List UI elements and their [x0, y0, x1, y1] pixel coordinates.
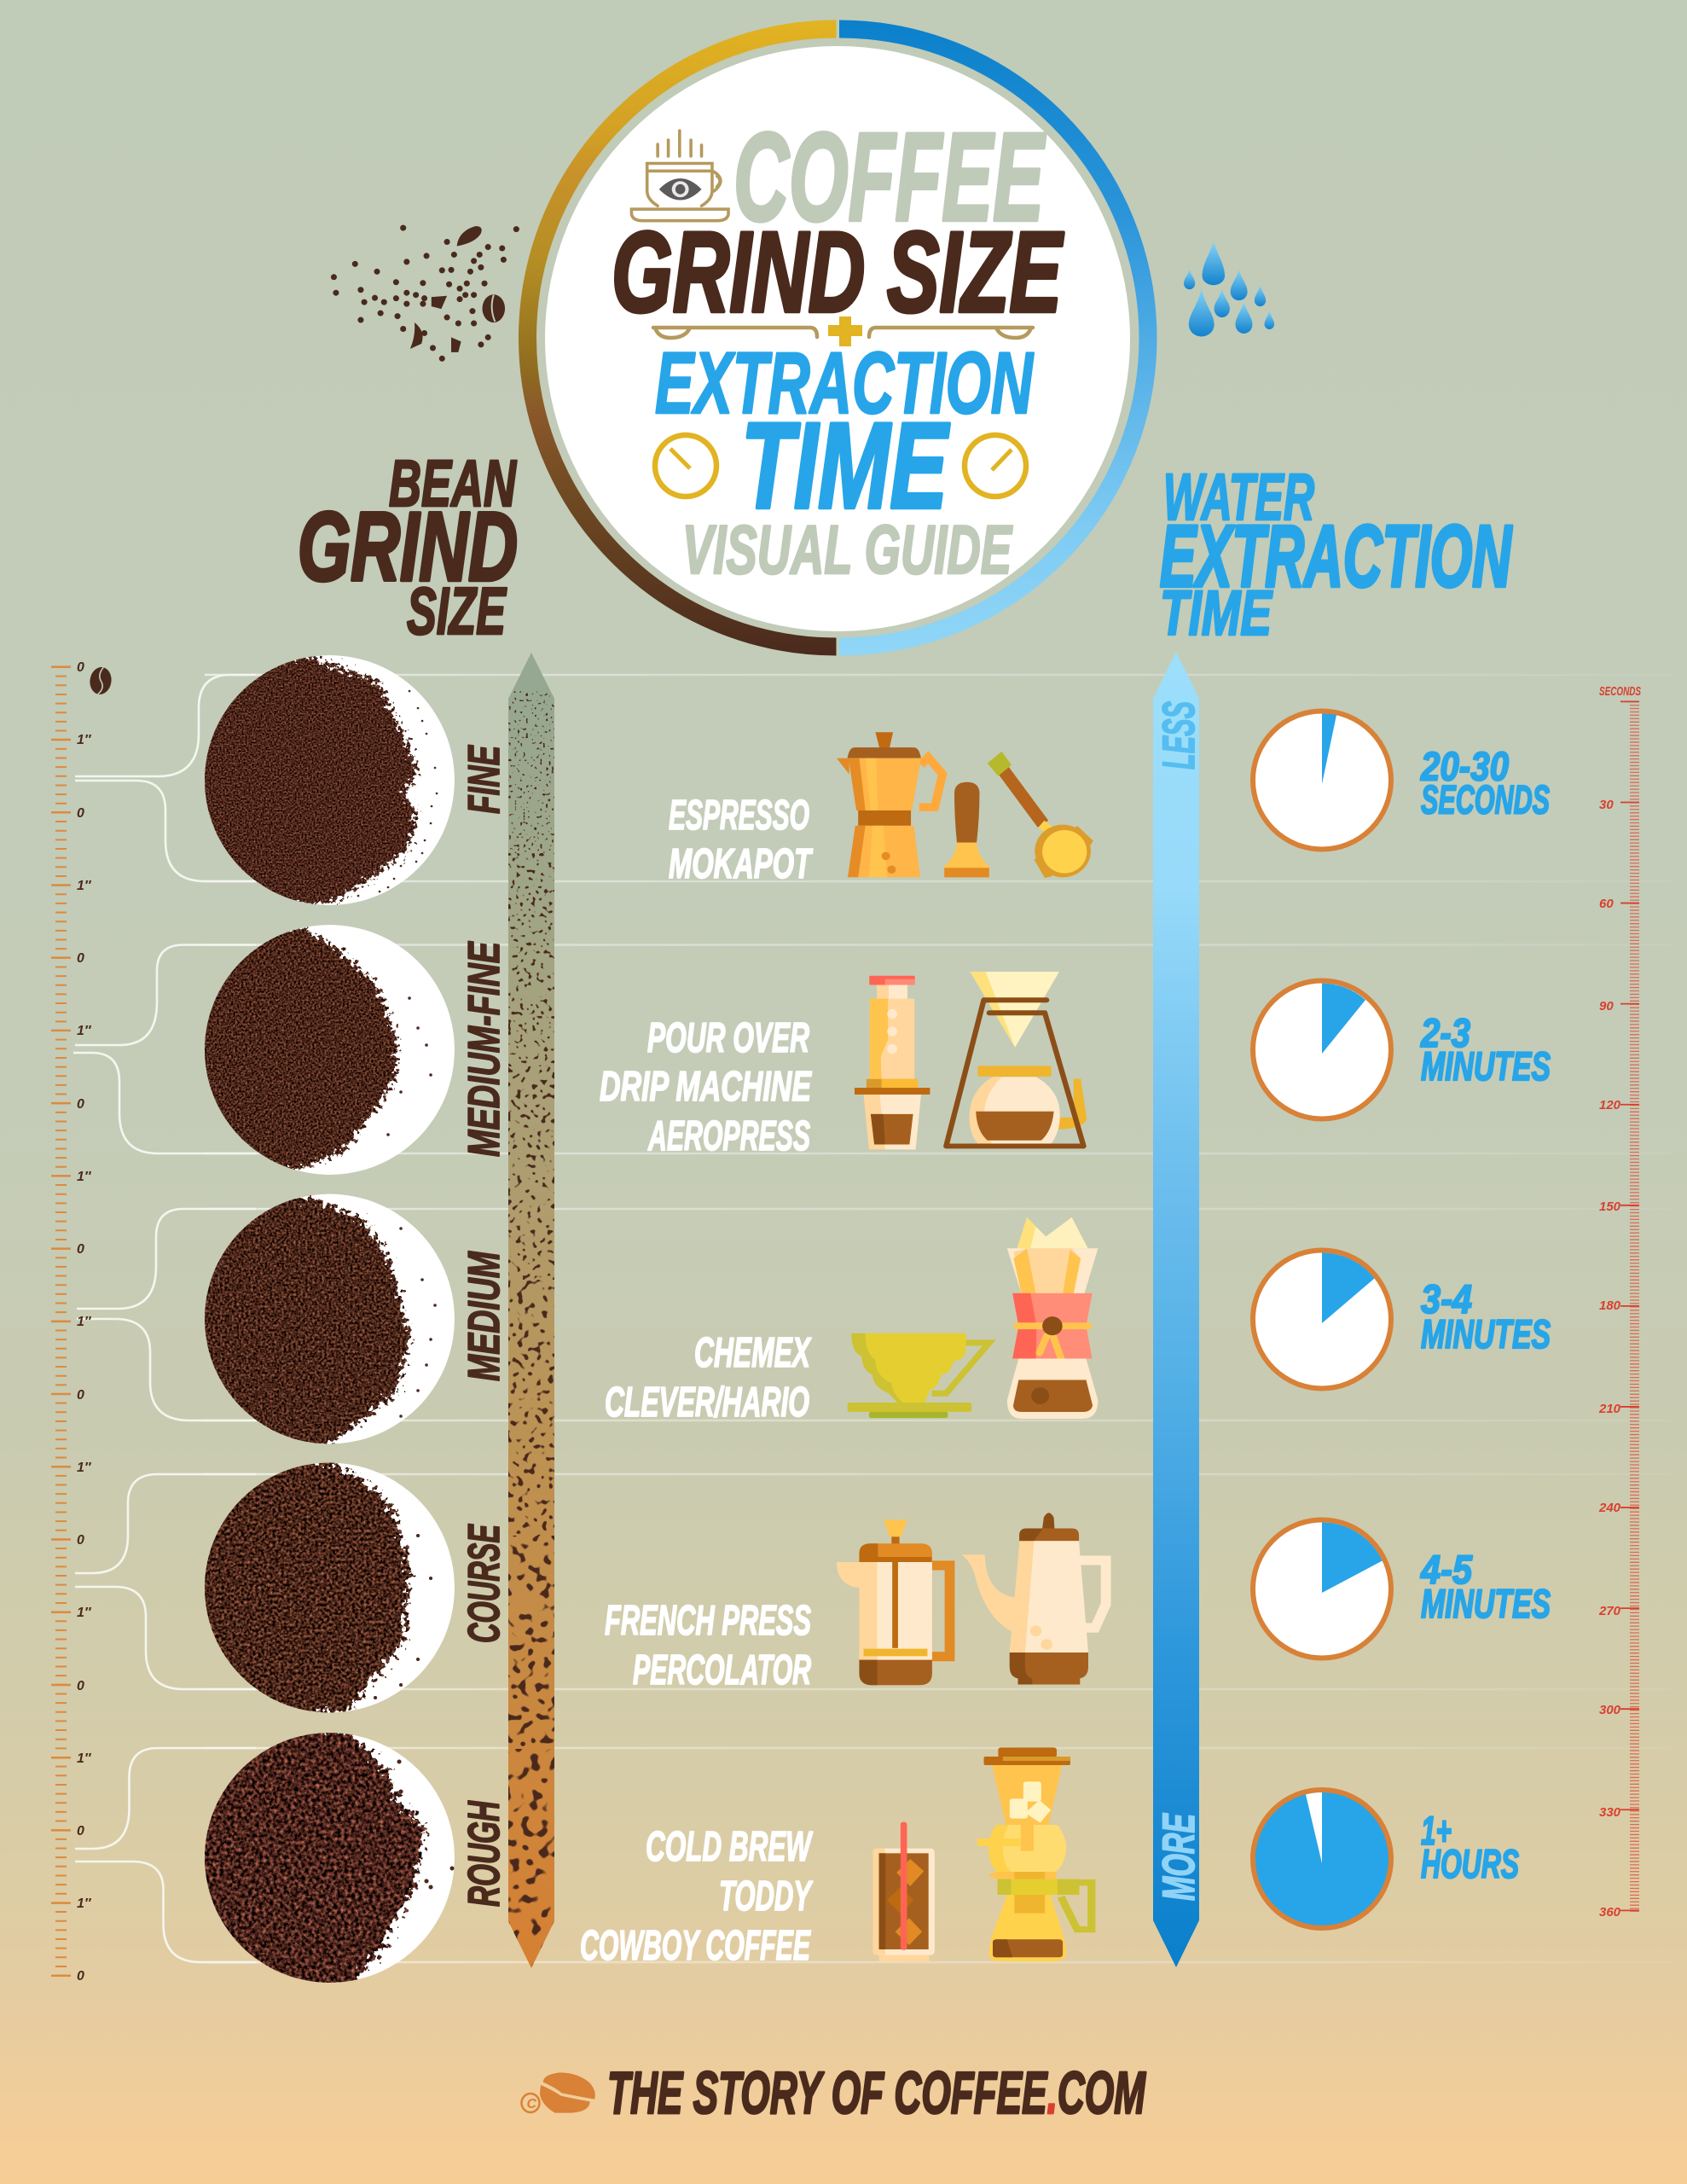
title: grind size: GRIND SIZE — [612, 209, 1064, 336]
methods: french press, percolator: PERCOLATOR — [633, 1647, 811, 1693]
icon: right clock — [965, 435, 1026, 497]
ruler: seconds: 300 — [1599, 1703, 1621, 1717]
row: course — [171, 1450, 1551, 1723]
ruler: seconds: 150 — [1599, 1199, 1621, 1214]
coffee grounds photo: medium-fine — [205, 925, 455, 1175]
heading: bean grind size: SIZE — [407, 573, 507, 648]
methods: pour over, drip machine, aeropress — [600, 1015, 812, 1159]
coffee grounds photo: fine — [205, 655, 455, 905]
methods: french press, percolator: FRENCH PRESS — [605, 1598, 811, 1644]
ruler: inches: 0 — [77, 660, 84, 675]
ruler: inches: 1″ — [77, 879, 92, 893]
label: fine: FINE — [460, 745, 509, 814]
heading: bean grind size: BEAN — [389, 447, 517, 520]
clock: 1+ hours — [1253, 1790, 1391, 1928]
time label: 3-4 minutes — [1421, 1276, 1551, 1356]
copyright mark — [522, 2094, 539, 2112]
row: rough — [205, 1733, 1520, 1983]
methods: cold brew, toddy, cowboy coffee: TODDY — [719, 1873, 814, 1920]
icon: orange coffee bean — [540, 2072, 595, 2113]
ruler: inches: 0 — [77, 1969, 84, 1984]
clock: 4-5 minutes — [1253, 1520, 1391, 1658]
label: more: MORE — [1154, 1813, 1204, 1901]
ruler: seconds: 60 — [1599, 897, 1614, 911]
row: fine — [171, 648, 1093, 913]
icon: scattered coffee grounds — [333, 226, 516, 358]
methods: chemex, clever/hario — [605, 1330, 812, 1426]
methods: cold brew, toddy, cowboy coffee — [580, 1824, 814, 1969]
icon: hario dripper — [848, 1333, 989, 1418]
time label: 3-4 minutes: 3-4 — [1421, 1276, 1472, 1321]
ruler: inches: 0 — [77, 1388, 84, 1403]
plus sign — [828, 317, 862, 346]
ruler: seconds — [1598, 684, 1641, 1920]
label: medium-fine: MEDIUM-FINE — [460, 941, 509, 1157]
coffee grounds photo: course — [205, 1462, 455, 1713]
row separator lines — [205, 675, 1672, 1962]
footer logo — [522, 2059, 1146, 2126]
title: visual guide: VISUAL GUIDE — [682, 512, 1013, 589]
ruler: inches: 1″ — [77, 1315, 92, 1329]
heading: bean grind size — [298, 447, 518, 648]
size brackets — [73, 675, 256, 1962]
icon: portafilter — [988, 752, 1093, 878]
arrow: water time, less to more — [1153, 652, 1204, 1967]
label: medium: MEDIUM — [460, 1251, 509, 1381]
copyright mark: C — [527, 2097, 537, 2111]
clock: 20-30 seconds — [1253, 712, 1391, 850]
clock: 2-3 minutes — [1253, 981, 1391, 1119]
time label: 20-30 seconds: 20-30 — [1420, 744, 1509, 788]
time label: 2-3 minutes — [1420, 1010, 1551, 1089]
row: medium-fine — [171, 917, 1551, 1186]
coffee grounds photo: rough — [205, 1733, 455, 1983]
ruler: inches: 0 — [77, 806, 84, 821]
ruler: inches — [61, 660, 92, 1984]
label: rough: ROUGH — [460, 1800, 509, 1907]
icon: water drops — [1184, 242, 1274, 336]
methods: cold brew, toddy, cowboy coffee: COWBOY COFFEE — [580, 1923, 811, 1969]
icon: right spoon — [869, 328, 1033, 338]
ruler: seconds: 270 — [1598, 1604, 1621, 1618]
ruler: seconds: 210 — [1598, 1402, 1621, 1416]
methods: pour over, drip machine, aeropress: DRIP MACHINE — [600, 1064, 812, 1110]
label: less: LESS — [1154, 701, 1204, 770]
ruler: seconds: 120 — [1599, 1098, 1621, 1112]
ruler: seconds: 330 — [1599, 1805, 1621, 1820]
icon: tamper — [944, 782, 989, 877]
time label: 2-3 minutes: MINUTES — [1421, 1043, 1551, 1089]
ruler: inches: 0 — [77, 1097, 84, 1112]
methods: espresso, mokapot — [669, 793, 814, 887]
title: extraction: EXTRACTION — [655, 334, 1035, 432]
ruler: seconds: 240 — [1598, 1501, 1621, 1515]
icon: coffee cup with eye — [631, 131, 728, 221]
ruler: inches: 0 — [77, 951, 84, 966]
icon: coffee bean — [88, 665, 113, 696]
icon: left spoon — [653, 328, 817, 338]
ruler: seconds: 90 — [1599, 999, 1614, 1014]
time label: 3-4 minutes: MINUTES — [1421, 1311, 1551, 1356]
arrow: grind size, fine to rough — [508, 653, 554, 1968]
row: medium — [171, 1186, 1551, 1455]
white title disc — [545, 46, 1130, 631]
methods: pour over, drip machine, aeropress: POUR OVER — [647, 1015, 809, 1061]
website name: THE STORY OF COFFEE.COM — [607, 2059, 1146, 2126]
methods: pour over, drip machine, aeropress: AEROPRESS — [647, 1113, 810, 1159]
icon: pour-over dripper and carafe — [946, 972, 1087, 1146]
ruler: seconds: 30 — [1599, 798, 1614, 812]
ruler: inches: 0 — [77, 1533, 84, 1548]
icon: cold brew tower — [977, 1747, 1092, 1961]
ruler: inches: 1″ — [77, 1461, 92, 1475]
label: course: COURSE — [460, 1524, 509, 1643]
time label: 4-5 minutes: 4-5 — [1420, 1547, 1473, 1592]
title emblem — [527, 29, 1148, 647]
ruler: inches: 0 — [77, 1824, 84, 1838]
time label: 1+ hours — [1421, 1808, 1519, 1886]
icon: moka pot — [837, 732, 942, 877]
icon: aeropress — [855, 976, 930, 1149]
ruler: inches: 1″ — [77, 1896, 92, 1911]
time label: 4-5 minutes — [1420, 1547, 1551, 1626]
icon: left clock — [655, 435, 716, 497]
progress ring: water blue — [839, 29, 1148, 647]
ruler: inches: 1″ — [77, 1606, 92, 1620]
ruler: inches: 1″ — [77, 1024, 92, 1038]
time label: 2-3 minutes: 2-3 — [1420, 1010, 1470, 1055]
methods: french press, percolator — [605, 1598, 811, 1693]
time label: 20-30 seconds — [1420, 744, 1550, 822]
methods: espresso, mokapot: MOKAPOT — [669, 841, 814, 887]
time label: 20-30 seconds: SECONDS — [1421, 776, 1550, 822]
heading: water extraction time: WATER — [1163, 461, 1314, 534]
heading: bean grind size: GRIND — [298, 493, 518, 601]
methods: chemex, clever/hario: CHEMEX — [694, 1330, 812, 1376]
ruler: inches: 1″ — [77, 733, 92, 747]
time label: 1+ hours: 1+ — [1421, 1808, 1452, 1853]
icon: percolator pot — [961, 1513, 1106, 1685]
time label: 1+ hours: HOURS — [1421, 1841, 1519, 1886]
title: time: TIME — [741, 398, 950, 534]
progress ring: grind gold to brown — [527, 29, 836, 647]
icon: iced coffee glass — [872, 1822, 935, 1961]
methods: espresso, mokapot: ESPRESSO — [669, 793, 809, 839]
ruler: seconds: 360 — [1599, 1905, 1621, 1920]
icon: french press — [837, 1520, 950, 1685]
icon: chemex — [1007, 1217, 1098, 1419]
ruler: inches: 1″ — [77, 1170, 92, 1184]
ruler: inches: 0 — [77, 1679, 84, 1693]
time label: 4-5 minutes: MINUTES — [1421, 1581, 1551, 1626]
ruler: seconds: SECONDS — [1599, 684, 1641, 699]
ruler: inches: 0 — [77, 1242, 84, 1257]
clock: 3-4 minutes — [1253, 1251, 1391, 1389]
ruler: seconds: 180 — [1599, 1298, 1621, 1313]
heading: water extraction time — [1160, 461, 1512, 648]
title: coffee: COFFEE — [733, 107, 1046, 247]
ruler: inches: 1″ — [77, 1751, 92, 1766]
methods: chemex, clever/hario: CLEVER/HARIO — [605, 1380, 809, 1426]
heading: water extraction time: TIME — [1160, 578, 1273, 648]
methods: cold brew, toddy, cowboy coffee: COLD BREW — [646, 1824, 813, 1870]
coffee grounds photo: medium — [205, 1194, 455, 1443]
